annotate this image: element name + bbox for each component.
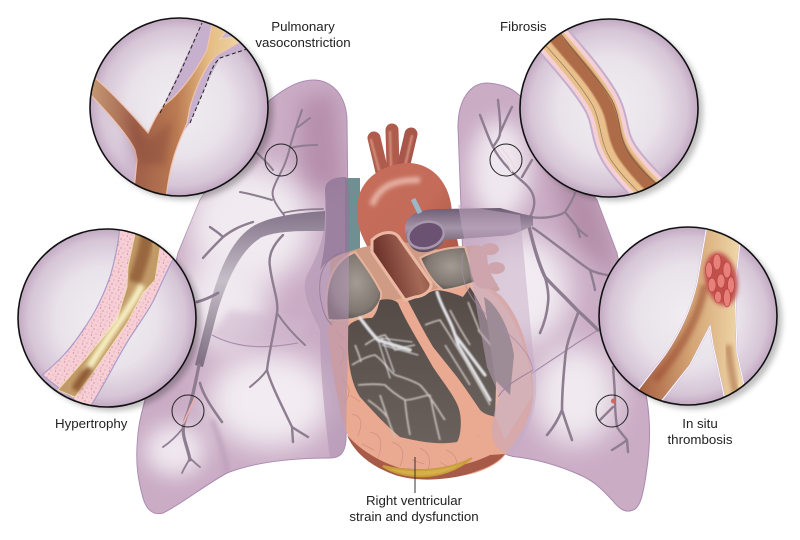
label: pulmonary vasoconstriction: vasoconstriction: [255, 35, 351, 50]
locator circle: thrombosis: [596, 395, 628, 427]
epicardium base and fat: [347, 435, 505, 480]
leader line: right ventricle: [414, 457, 416, 493]
translucent lung lobes over heart: [305, 177, 536, 458]
aortic arch branches: [371, 130, 412, 172]
inset: hypertrophy: [18, 225, 201, 411]
pulmonary artery: [405, 208, 533, 252]
right lung: [458, 83, 650, 511]
aortic root, opened: [372, 233, 431, 300]
myocardium wall: [328, 283, 533, 479]
muscle fibre texture: [335, 310, 479, 470]
locator circle: vasoconstriction: [265, 144, 297, 176]
locator circle: fibrosis: [490, 144, 522, 176]
superior vena cava: [345, 178, 360, 262]
heart backing: [330, 240, 500, 330]
septum top: [398, 302, 488, 445]
label: right ventricular strain: strain and dysfunction: [349, 509, 479, 524]
right side atrium cavity: [420, 247, 476, 290]
inset: fibrosis: [520, 19, 703, 201]
left lung: [137, 80, 349, 514]
aorta: [357, 163, 470, 305]
heart: [326, 130, 533, 480]
label: in situ thrombosis: In situ: [682, 416, 718, 431]
left side atrium cavity: [326, 252, 381, 321]
far wall pale band: [470, 283, 533, 440]
auricle lobes: [470, 243, 505, 289]
thrombus: [700, 249, 742, 309]
trabeculae: [352, 302, 495, 440]
ventricle cavity: left in image: [348, 299, 461, 443]
chordae and valves: [360, 292, 490, 400]
label: in situ thrombosis: thrombosis: [667, 432, 733, 447]
locator circle: hypertrophy: [172, 395, 204, 427]
inset: pulmonary vasoconstriction: [88, 18, 273, 200]
label: fibrosis: Fibrosis: [500, 19, 547, 34]
pulmonary branches: right lung: [480, 100, 628, 452]
label: right ventricular strain: Right ventricular: [366, 493, 462, 508]
inset: in situ thrombosis: [599, 225, 782, 409]
label: hypertrophy: Hypertrophy: [55, 416, 128, 431]
ventricle cavity: right in image: [408, 287, 497, 417]
pulmonary branches: left lung: [163, 110, 325, 473]
label: pulmonary vasoconstriction: Pulmonary: [271, 19, 335, 34]
